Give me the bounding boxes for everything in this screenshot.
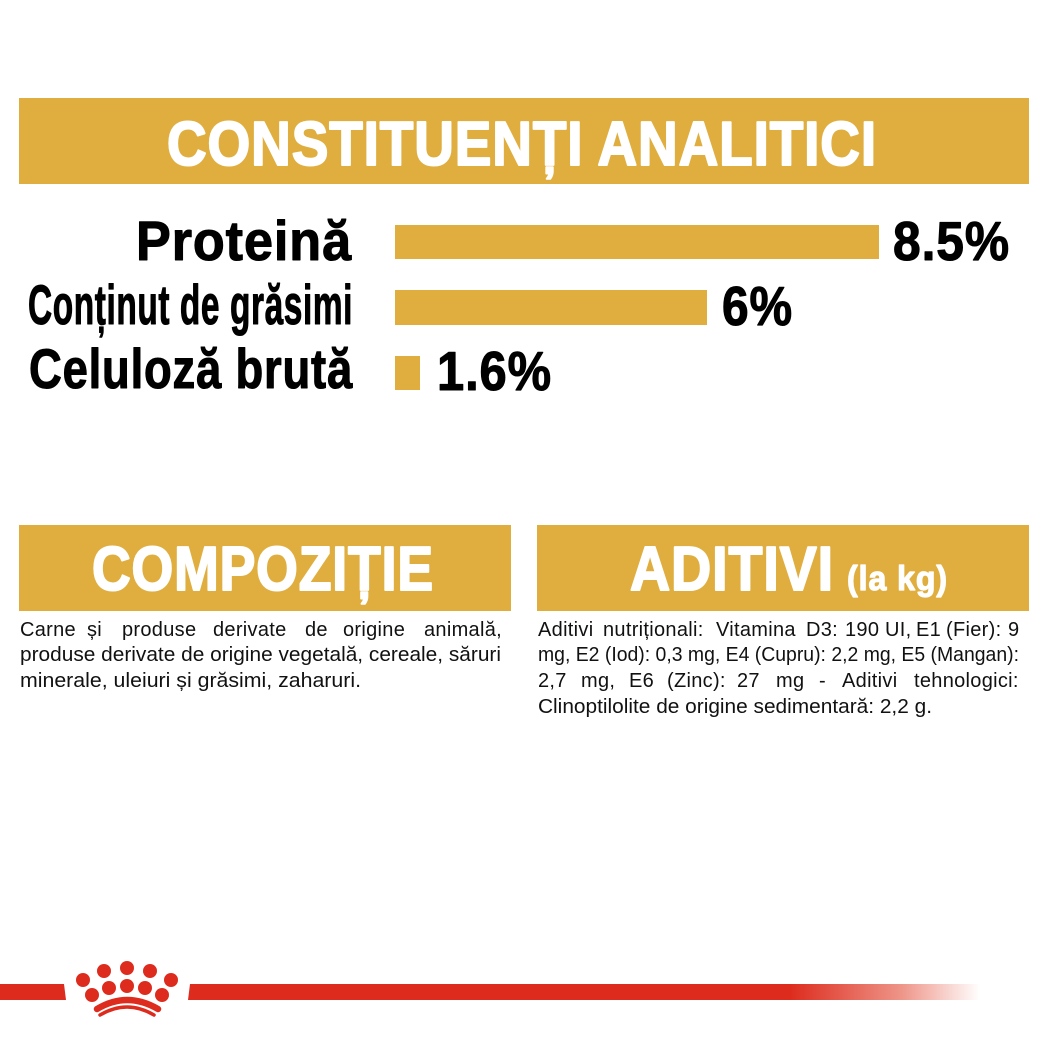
composition heading: COMPOZIȚIE <box>92 535 434 604</box>
additives text: E1 <box>916 619 941 641</box>
additives text: (Fier): <box>946 619 1001 641</box>
additives heading <box>537 525 1029 611</box>
row: crude fibre: 1.6% <box>437 340 552 402</box>
composition text: și <box>87 619 102 641</box>
composition text: de <box>305 619 328 641</box>
composition text: derivate <box>213 619 287 641</box>
additives text: Vitamina <box>716 619 796 641</box>
composition text: Carne <box>20 619 76 641</box>
footer red band: right fading segment <box>188 984 980 1000</box>
additives heading: ADITIVI <box>630 535 834 604</box>
row: crude fibre: Celuloză brută <box>29 337 353 400</box>
row: fat content: Conținut de grăsimi <box>28 273 353 337</box>
additives text: 190 <box>845 619 879 641</box>
composition text: minerale, uleiuri și grăsimi, zaharuri. <box>20 670 361 692</box>
row: fat content: 6% <box>722 275 793 337</box>
additives text: Clinoptilolite de origine sedimentară: 2,2 g. <box>538 696 932 718</box>
additives text: mg, E2 (Iod): 0,3 mg, E4 (Cupru): 2,2 mg, E5 (Mangan): <box>538 644 1019 666</box>
title banner: CONSTITUENȚI ANALITICI <box>167 110 877 179</box>
footer red band: left segment <box>0 984 66 1000</box>
panel: additives <box>537 525 1029 718</box>
additives text: Aditivi <box>842 670 897 692</box>
additives text: UI, <box>885 619 911 641</box>
additives text: E6 <box>629 670 654 692</box>
additives text: mg, <box>581 670 615 692</box>
composition text: animală, <box>424 619 502 641</box>
title banner <box>19 98 1029 184</box>
additives heading: (la kg) <box>847 560 948 598</box>
additives text: mg <box>776 670 804 692</box>
composition text: produse <box>122 619 196 641</box>
composition text: produse derivate de origine vegetală, cereale, săruri <box>20 644 501 666</box>
additives text: 9 <box>1008 619 1019 641</box>
panel: composition <box>19 525 511 692</box>
composition heading <box>19 525 511 611</box>
additives text: 27 <box>737 670 760 692</box>
icon: crown logo <box>76 961 178 1015</box>
additives text: tehnologici: <box>914 670 1019 692</box>
composition text: origine <box>343 619 405 641</box>
row: protein: 8.5% <box>893 210 1010 272</box>
additives text: (Zinc): <box>667 670 726 692</box>
additives text: 2,7 <box>538 670 567 692</box>
row: protein: Proteină <box>136 209 352 272</box>
composition text <box>20 619 502 692</box>
additives text: nutriționali: <box>603 619 704 641</box>
panel: analytical constituents <box>19 98 1029 402</box>
additives text <box>538 619 1019 718</box>
additives text: - <box>819 670 826 692</box>
row: protein <box>136 209 1010 272</box>
additives text: D3: <box>806 619 838 641</box>
additives text: Aditivi <box>538 619 593 641</box>
